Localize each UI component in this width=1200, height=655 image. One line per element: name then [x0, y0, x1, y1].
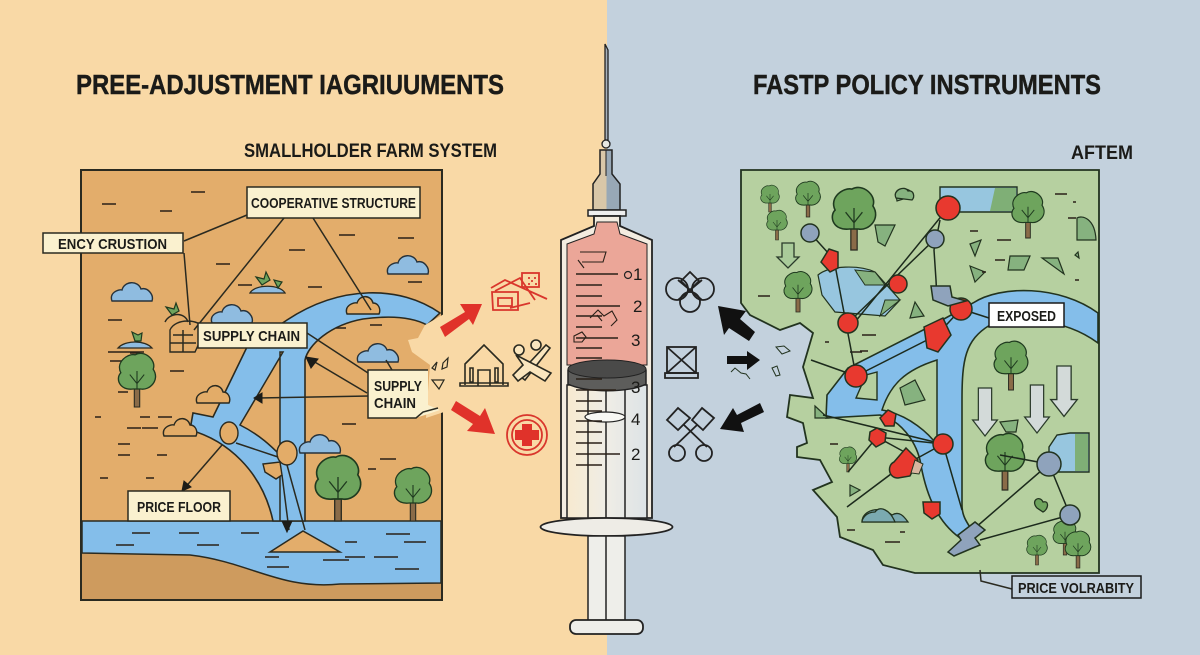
tick marks: [576, 274, 620, 465]
polygon patches: [815, 189, 1096, 496]
icon: clover knot: [666, 272, 714, 312]
icon: crossed paddles: [667, 408, 714, 461]
plunger rod: [570, 536, 643, 634]
subheading: smallholder farm system: SMALLHOLDER FARM SYSTEM: [244, 141, 497, 162]
blue-green bushes: [862, 188, 1048, 522]
small dashes: [758, 194, 1079, 542]
scale numbers: 1: [633, 265, 642, 284]
river: [190, 293, 440, 521]
connector lines: [183, 215, 392, 530]
title: right heading: FASTP POLICY INSTRUMENTS: [753, 69, 1101, 100]
trees: [761, 181, 1091, 568]
arrows: black pointing out: [718, 306, 764, 432]
scale numbers: 3: [631, 378, 640, 397]
plants: [108, 272, 285, 361]
label: price volrabity: [980, 570, 1141, 598]
arrow: red upper: [440, 304, 482, 337]
arrowheads: [182, 357, 318, 532]
mounds: [163, 297, 380, 436]
inner disc: [585, 412, 625, 422]
icon: house: [460, 345, 508, 386]
plunger rods: [588, 388, 625, 518]
fragments: torn paper bits: [432, 358, 448, 389]
network lines: [810, 208, 1070, 540]
label: supply chain torn: CHAIN: [374, 395, 416, 412]
red nodes: [821, 196, 972, 519]
background: left panel: [0, 0, 607, 655]
rubber stopper: [568, 360, 646, 391]
scale numbers: 2: [631, 445, 640, 464]
river: [826, 291, 1098, 538]
scale numbers: 2: [633, 297, 642, 316]
ground strip: [82, 553, 441, 599]
needle: [605, 44, 608, 140]
fluid: [567, 222, 647, 365]
flange: [540, 518, 672, 536]
green down arrow: [777, 243, 799, 268]
field dashes: [95, 192, 422, 478]
arrow: red lower: [451, 401, 495, 434]
lower clear barrel: [567, 385, 647, 518]
scale numbers: 3: [631, 331, 640, 350]
scale numbers: 4: [631, 410, 640, 429]
rocks in river: [220, 422, 297, 479]
label: supply chain: SUPPLY CHAIN: [203, 328, 300, 345]
label: price floor: [128, 491, 230, 521]
label: exposed: [989, 303, 1064, 327]
icon: red tools: [491, 273, 547, 310]
fluid scribbles: [574, 252, 617, 342]
label: cooperative structure: [247, 187, 420, 218]
icon: crossed tools: [513, 340, 551, 381]
background: right panel: [607, 0, 1200, 655]
label: supply chain torn: SUPPLY: [374, 378, 422, 395]
label: exposed: EXPOSED: [997, 308, 1056, 325]
white down arrows: [973, 366, 1077, 436]
lakes: [818, 187, 1089, 472]
icon: red medical cross: [507, 415, 547, 455]
barrel glass: [561, 216, 652, 518]
scale numbers: [624, 265, 642, 464]
label: cooperative structure: COOPERATIVE STRUCTURE: [251, 195, 416, 212]
icon: crossed box: [665, 347, 698, 378]
subheading: after: AFTEM: [1071, 143, 1133, 164]
sand bar: [270, 531, 340, 552]
small sand patch: [911, 460, 923, 474]
torn edge: left panel: [408, 314, 470, 418]
trees: [118, 353, 432, 521]
grey nodes: [801, 224, 1080, 556]
label: supply chain torn: [368, 370, 440, 418]
label: price volrabity: PRICE VOLRABITY: [1018, 580, 1134, 597]
panel: exposed landscape map: [731, 170, 1099, 573]
label: price floor: PRICE FLOOR: [137, 499, 221, 516]
fragments in torn gap: [731, 346, 790, 379]
clouds: [111, 256, 428, 453]
panel: smallholder farm map: [81, 170, 442, 600]
label: supply chain: [198, 323, 307, 348]
syringe: [540, 44, 672, 634]
title: left heading: PREE-ADJUSTMENT IAGRIUUMENTS: [76, 69, 504, 100]
hub: [588, 140, 626, 216]
label: ency crustion: ENCY CRUSTION: [58, 236, 167, 253]
lake: [82, 521, 441, 585]
